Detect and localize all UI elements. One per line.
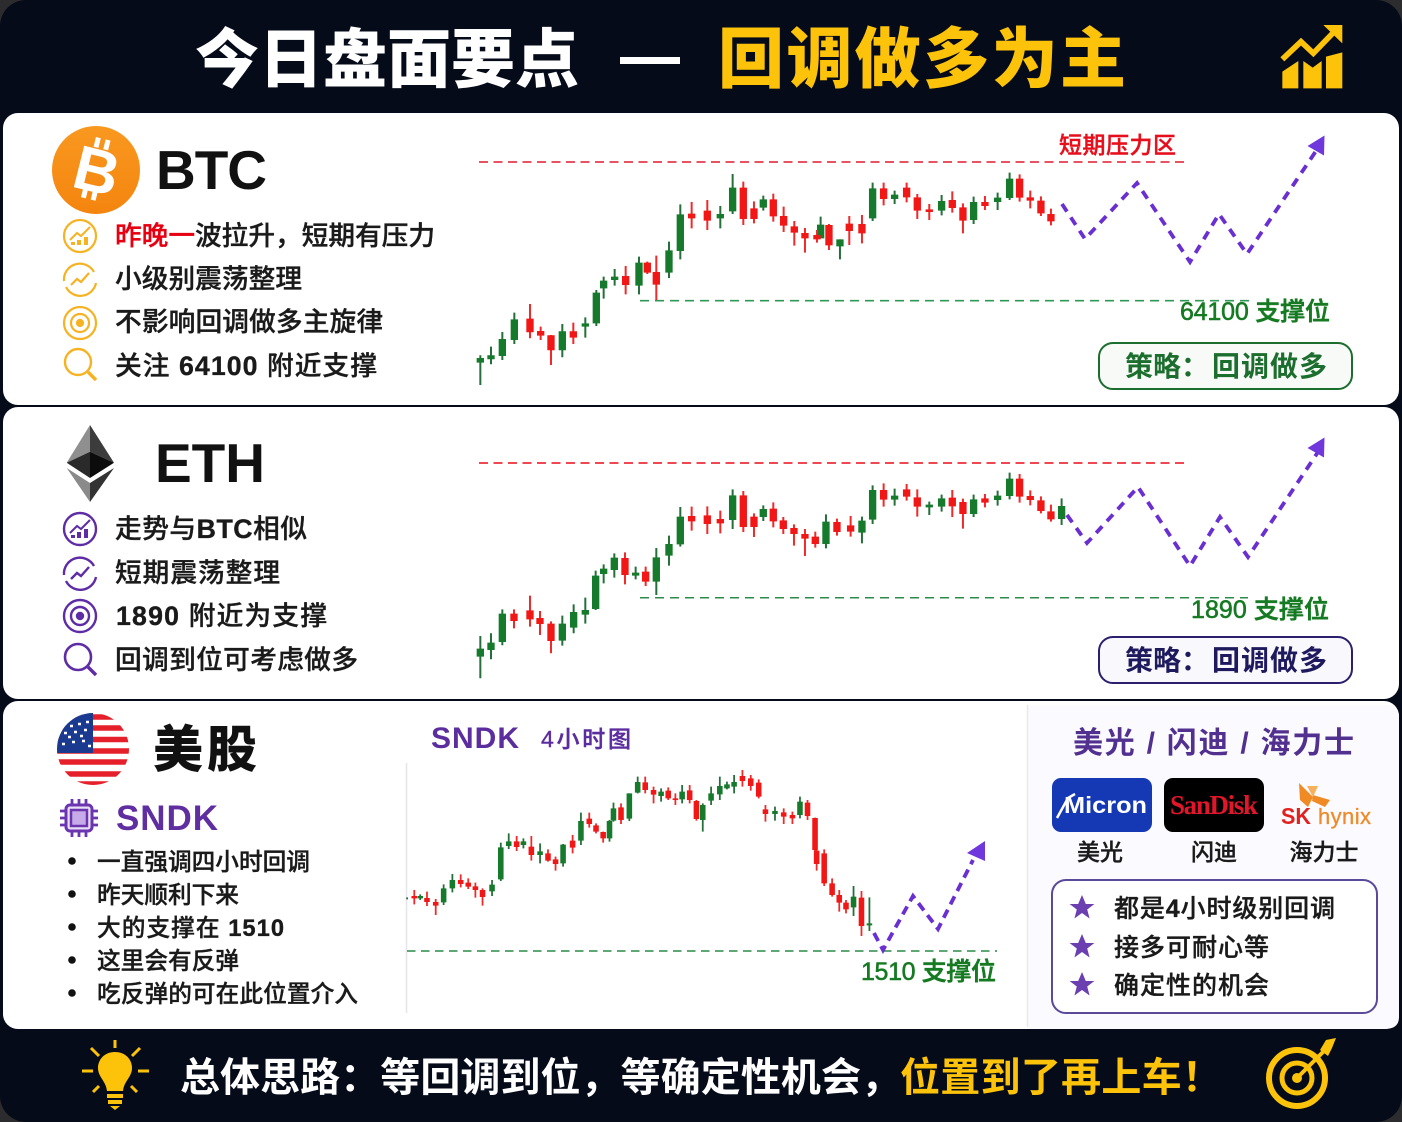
- text: line 3: 不影响回调做多主旋律: [115, 307, 383, 337]
- header band: [195, 22, 1342, 96]
- logo: SK hynix: SK: [1281, 803, 1311, 829]
- icon: star 2: [1070, 934, 1094, 958]
- logo: SK hynix: hynix: [1318, 804, 1371, 829]
- candles: [480, 473, 1062, 678]
- icon: magnifier: [65, 644, 96, 675]
- panel: memory makers: [1028, 705, 1399, 1029]
- strategy box: [1099, 343, 1352, 389]
- strategy box: 回调做多: [1212, 351, 1327, 382]
- text: line 1: 一直强调四小时回调: [97, 849, 310, 876]
- chart title: SNDK: [431, 722, 519, 755]
- icon: target circle: [64, 600, 96, 632]
- bullet list: ETH: [64, 513, 358, 675]
- icon: rising bar chart: [1282, 25, 1342, 88]
- heading: SNDK: SNDK: [116, 799, 218, 838]
- text: line 3: 大的支撑在 1510: [97, 915, 284, 942]
- icon: oscillation circle: [64, 558, 96, 590]
- icon: magnifier: [65, 349, 96, 380]
- footer band: [82, 1038, 1336, 1110]
- projected path arrow: [1067, 438, 1324, 566]
- label: support: 1890 支撑位: [1191, 596, 1329, 624]
- sidebar background: [1028, 705, 1399, 1029]
- icon: chart circle: [64, 220, 96, 252]
- title: yellow part: 回调做多为主: [718, 22, 1126, 96]
- text: line 1: 昨晚一波拉升，短期有压力: [115, 221, 435, 251]
- label: Micron: 美光: [1077, 839, 1123, 865]
- icon: chart circle: [64, 513, 96, 545]
- icon: ethereum diamond: [67, 425, 114, 502]
- heading: ETH: ETH: [155, 432, 265, 494]
- US panel background: [3, 701, 1399, 1029]
- panel: ETH: [3, 407, 1399, 699]
- chart subtitle: 4小时图: [541, 726, 631, 752]
- text: line 1: 走势与BTC相似: [115, 514, 307, 544]
- heading: BTC: BTC: [156, 139, 267, 201]
- ETH panel background: [3, 407, 1399, 699]
- icon: target with arrow: [1269, 1038, 1336, 1106]
- title dash: [620, 57, 680, 64]
- heading: makers: 美光 / 闪迪 / 海力士: [1073, 727, 1354, 760]
- BTC panel background: [3, 113, 1399, 405]
- strategy box: 回调做多: [1212, 645, 1327, 676]
- logo: SanDisk: [1164, 778, 1264, 832]
- logo: Micron: Micron: [1064, 792, 1147, 818]
- resistance line: [479, 462, 1188, 464]
- text: white summary: 总体思路：等回调到位，等确定性机会，: [180, 1056, 901, 1100]
- logo: Micron: [1052, 778, 1152, 832]
- resistance line: [479, 161, 1188, 163]
- panel: BTC: [3, 113, 1399, 405]
- strategy box: [1099, 637, 1352, 683]
- text: line 2: 小级别震荡整理: [115, 264, 302, 294]
- label: support: 1510 支撑位: [861, 958, 996, 986]
- chart: ETH candlesticks: [479, 438, 1352, 683]
- text: line 2: 昨天顺利下来: [97, 882, 239, 909]
- text: line 4: 这里会有反弹: [97, 948, 239, 975]
- icon: star 1: [1070, 895, 1094, 918]
- bullet list: SNDK: [68, 849, 358, 1008]
- text: point 1: 都是4小时级别回调: [1114, 895, 1335, 923]
- text: line 4: 关注 64100 附近支撑: [115, 351, 377, 381]
- icon: lightbulb: [82, 1040, 149, 1110]
- text: line 3: 1890 附近为支撑: [116, 601, 327, 631]
- sidebar divider: [1026, 705, 1028, 1027]
- icon: star 3: [1070, 972, 1094, 996]
- callout box: [1052, 880, 1377, 1013]
- candles: [407, 770, 869, 936]
- text: line 5: 吃反弹的可在此位置介入: [97, 981, 358, 1008]
- heading: US stocks: 美股: [153, 722, 257, 778]
- logo: SK hynix: [1281, 783, 1371, 829]
- title: white part: 今日盘面要点: [195, 24, 579, 96]
- icon: bitcoin coin: [52, 126, 140, 214]
- text: yellow summary: 位置到了再上车！: [900, 1056, 1222, 1100]
- text: point 3: 确定性的机会: [1114, 972, 1269, 1000]
- icon: oscillation circle: [64, 264, 96, 296]
- text: line 2: 短期震荡整理: [115, 558, 280, 588]
- label: SanDisk: 闪迪: [1191, 839, 1237, 865]
- candles: [480, 173, 1051, 385]
- support line: [640, 597, 1248, 599]
- icon: bitcoin coin: B: [67, 133, 127, 211]
- icon: chip: [60, 799, 98, 837]
- support line: [407, 950, 997, 952]
- chart left axis: [406, 763, 408, 1013]
- label: resistance zone: 短期压力区: [1059, 132, 1176, 158]
- icon: target circle: [64, 307, 96, 339]
- text: line 4: 回调到位可考虑做多: [115, 645, 358, 675]
- icon: US flag: [57, 713, 129, 785]
- logo: SanDisk: SanDisk: [1170, 790, 1258, 820]
- label: support: 64100 支撑位: [1180, 298, 1330, 326]
- label: SK hynix: 海力士: [1290, 839, 1358, 865]
- panel: US stocks: [3, 701, 1399, 1029]
- support line: [640, 300, 1253, 302]
- bullet dots: [68, 857, 76, 997]
- strategy box: 策略：: [1125, 351, 1209, 382]
- text: point 2: 接多可耐心等: [1114, 934, 1269, 962]
- projected path arrow: [1062, 136, 1324, 262]
- chart: BTC candlesticks: [479, 132, 1352, 389]
- chart: SNDK candlesticks: [406, 722, 997, 1013]
- strategy box: 策略：: [1125, 645, 1209, 676]
- bullet list: BTC: [64, 220, 435, 381]
- projected path arrow: [874, 841, 985, 950]
